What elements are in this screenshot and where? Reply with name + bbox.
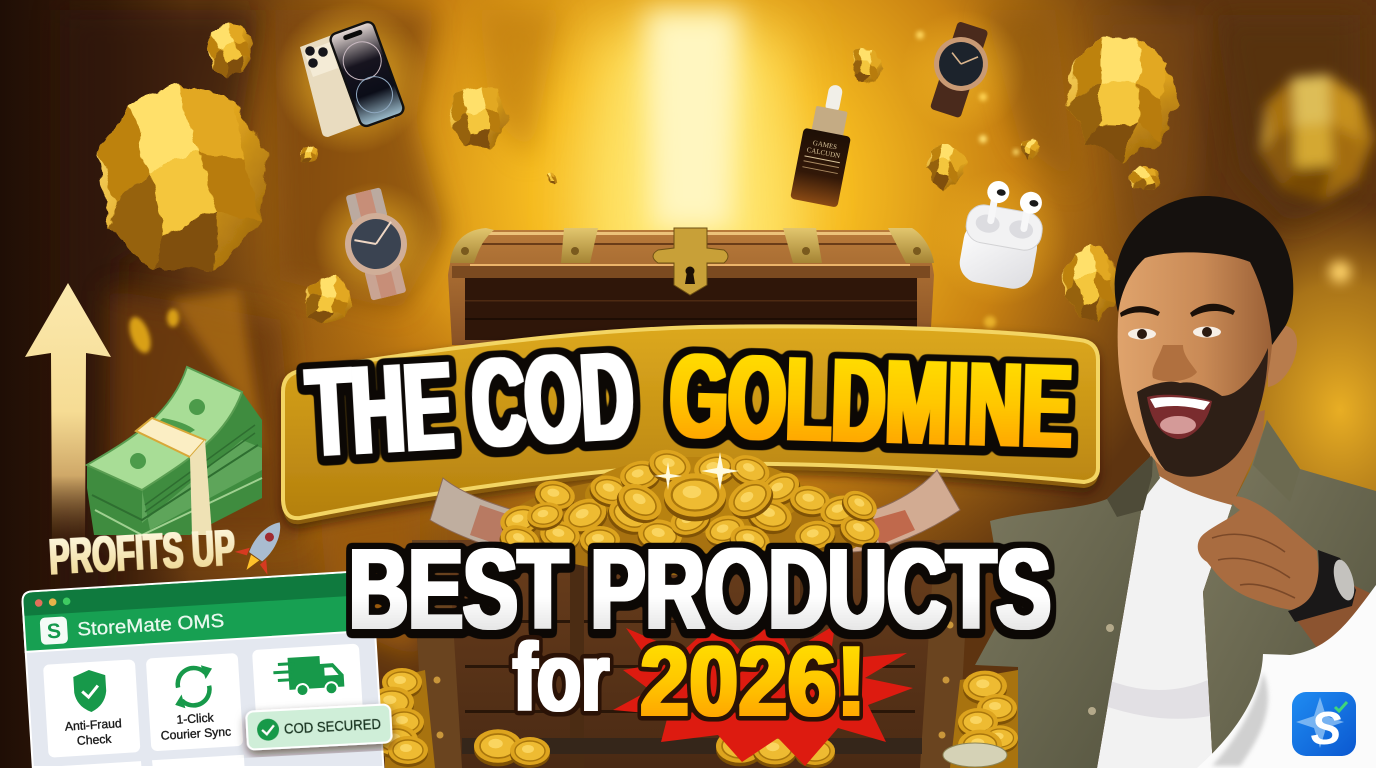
forearm <box>1290 585 1376 652</box>
title word: GOLDMINE: GOLDMINE <box>668 330 1074 473</box>
side coin heaps <box>370 668 1018 768</box>
icon: wireless earbuds case <box>957 177 1049 292</box>
icon: smartphone <box>300 20 405 137</box>
badge: COD SECURED <box>246 704 392 750</box>
card: 1-click courier sync: Courier Sync <box>160 725 232 743</box>
nose <box>1152 345 1197 381</box>
coin pile and banknotes <box>430 445 960 575</box>
app title: StoreMate OMS <box>77 611 225 641</box>
wristwatch <box>1288 550 1356 622</box>
treasure chest: lid <box>448 228 934 345</box>
icon: serum bottle: GAMES <box>812 139 838 151</box>
logo tile <box>40 616 68 645</box>
card: delivery <box>252 644 364 743</box>
nugget: centre left <box>450 84 509 148</box>
icon: serum bottle <box>790 81 860 208</box>
neck <box>1150 410 1265 505</box>
panel: StoreMate OMS window <box>22 571 383 768</box>
mouth <box>1147 395 1212 439</box>
banknote: left <box>430 478 545 558</box>
icon: rocket <box>230 511 296 581</box>
icon: latch and keyhole <box>653 228 728 295</box>
nugget: small spark <box>546 171 556 185</box>
headline: BEST PRODUCTS: BEST PRODUCTS <box>349 526 1051 652</box>
nugget: blurred far right <box>1253 63 1376 211</box>
title: THE COD GOLDMINE <box>304 327 1074 483</box>
icon: cash stack <box>87 367 262 535</box>
eyes <box>1128 328 1156 340</box>
ear <box>1268 325 1297 387</box>
beard <box>1137 348 1268 477</box>
presenter <box>975 196 1376 768</box>
icon: delivery truck <box>288 655 344 690</box>
gold nuggets <box>93 16 1191 331</box>
headline: for: for <box>513 624 609 731</box>
panel: StoreMate OMS window: S <box>46 620 62 644</box>
card: 1-click courier sync: 1-Click <box>176 710 215 727</box>
hair <box>1115 196 1293 345</box>
card: anti-fraud check <box>43 659 140 758</box>
nugget: top left <box>204 16 258 82</box>
card: anti-fraud check: Anti-Fraud <box>64 716 122 734</box>
face <box>1118 238 1273 476</box>
headline: 2026!: 2026! <box>640 626 866 736</box>
nugget: small right <box>1127 163 1165 196</box>
nugget: lower left <box>297 271 358 331</box>
page curl <box>1197 585 1376 768</box>
white t-shirt <box>1097 470 1232 768</box>
window body <box>23 581 383 767</box>
nugget: small left <box>297 141 321 167</box>
treasure chest: body <box>412 540 970 768</box>
title banner <box>283 326 1098 524</box>
window header <box>22 571 375 652</box>
row two cards <box>49 761 142 768</box>
red starburst <box>613 620 913 766</box>
banknote: right <box>835 470 960 552</box>
icon: silver and rose-gold watch <box>333 184 419 304</box>
nugget: top centre <box>849 44 886 87</box>
card: 1-click courier sync <box>146 653 243 751</box>
eyebrows <box>1120 306 1160 317</box>
title word: THE COD: THE COD <box>304 327 637 483</box>
icon: leather watch <box>919 18 999 122</box>
hand <box>1198 496 1322 611</box>
nugget: mid right <box>922 138 971 195</box>
nugget: lower right <box>1064 245 1118 321</box>
card: anti-fraud check: Check <box>76 732 113 748</box>
icon: upward arrow <box>25 283 111 540</box>
icon: brand logo: S <box>1311 702 1342 754</box>
nugget: large right <box>1056 22 1191 171</box>
icon: brand logo <box>1292 692 1356 756</box>
badge: COD SECURED: COD SECURED <box>284 717 381 738</box>
icon: serum bottle: CALCUDN <box>806 146 841 160</box>
open shirt <box>975 454 1160 768</box>
nugget: big left <box>93 73 278 283</box>
nugget: tiny right <box>1020 135 1043 161</box>
label: PROFITS UP: PROFITS UP <box>48 519 236 585</box>
